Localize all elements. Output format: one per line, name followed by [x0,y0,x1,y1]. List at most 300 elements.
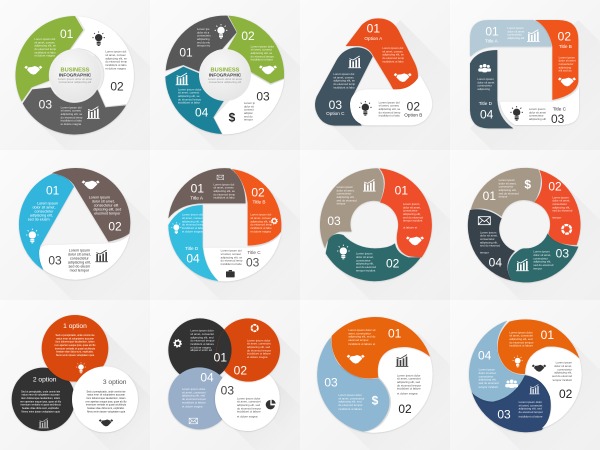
text 02: adipiscing elit, [554,371,572,375]
text 02: incididunt ut labo [250,226,272,230]
icon: bar chart [39,419,49,428]
text 03: do eiusmod tempor [237,406,261,410]
icon: ring [251,325,258,331]
text 02: incididunt ut labo [379,114,400,118]
panel: tile 12, four-part swirl [450,300,600,450]
icon: pie chart [266,400,276,409]
number 01: 01 [179,46,193,60]
hub circle [199,49,251,101]
text 03: consectetur [529,114,544,118]
panel: tile 5, circle with triangular hollow [0,150,150,300]
icon: handshake [82,180,100,189]
hub text: consectetur adipiscing elit [59,80,91,84]
text 03: sit amet, consec [221,252,242,256]
number 01: 01 [367,22,380,36]
text 02: do eiusmod temp [379,110,401,114]
panel: tile 4, rounded square [450,0,600,150]
text 04: consectetur [480,237,495,241]
number 04: 04 [480,107,494,121]
text 02: consectetur [557,367,572,371]
number 01: 01 [46,183,60,197]
icon: handshake [347,355,365,364]
text 04: dolor sit amet, [480,234,498,238]
text 02: consectetur [559,62,573,66]
icon: handshake [394,73,412,82]
text 02: consectetur [552,202,567,206]
text 01: et dolore magna [190,345,211,349]
number 03: 03 [556,247,569,261]
text 01: adipiscing elit, se [213,189,235,193]
text 04: sit amet, consectet [182,390,206,394]
hub text: consectetur adipiscing elit [209,80,241,84]
text 01: dolor sit amet, [33,206,55,210]
text option 2: beatae vitae dicta sunt, explicabo. [22,407,60,410]
number 01: 01 [485,24,499,38]
segment 03 gray [23,87,126,135]
text 02: Lorem ipsum dolor [247,338,270,342]
text 03: dolor sit amet, [337,188,355,192]
text 02: sit amet, consectet [247,342,271,346]
text 04: consectetur [477,84,492,88]
number 01: 01 [60,27,74,41]
text 02: Lorem ipsum [559,55,576,59]
hub circle [49,49,101,101]
number 03: 03 [256,90,270,104]
title C: Title C [553,107,567,112]
icon: mail [189,418,198,424]
text 03: adipiscing elit, sed [338,400,362,404]
text 01: tempor incidunt [403,219,423,223]
text 01: sed do eiusm [28,218,50,222]
number 04: 04 [200,370,214,384]
panel: tile 7, donut with three segments [300,150,450,300]
text 01: adipiscing elit, [403,212,421,216]
text 02: do eiusmod tempor [397,383,421,387]
segment 03 tan [320,168,384,248]
icon: bulb [337,245,350,259]
icon: bar chart [527,30,540,42]
segment 01 dark gray [166,16,237,72]
text 01: sit amet, consec [382,49,403,53]
icon: mail [217,175,224,180]
text 03: adipiscing elit, sed [237,403,261,407]
text 02: sit amet, consec [105,53,126,57]
number 04: 04 [195,106,209,120]
text option 1: rem aperiam eaque ipsa, quae ab illo [55,344,96,347]
text 03: incididunt ut labore [519,415,543,419]
text 02: sed do eiusmod [552,209,573,213]
icon: mail [478,217,490,225]
text 01: adipiscing elit, sed do [348,335,376,339]
title B: Title B [252,200,266,205]
text 02: adipiscing elit, sed [397,380,421,384]
icon: bulb [510,106,523,121]
text 01: adipiscing elit, se [34,44,56,48]
text 01: Lorem ips [197,27,210,31]
icon: bulb [513,356,523,367]
text 02: Lorem ipsum dolor [397,373,420,377]
text 01: sed do eiu [197,40,210,44]
text 02: Lorem ipsum dol [105,50,127,54]
text 02: do eiusmod tempo [251,54,274,58]
text 03: do eiusmod tempor [338,403,363,407]
text 01: sed do eiusmod [499,191,519,195]
text 01: consectetur [507,33,522,37]
circle 01 dark [168,318,232,382]
text 03: dolor sit amet [529,110,546,114]
number 01: 01 [541,328,554,342]
text 01: consectetur [499,185,513,189]
text 03: adipiscing elit, se [61,112,83,116]
text 01: sit amet, consec [213,186,234,190]
text 03: adipisc [244,111,253,115]
icon: gear [174,340,181,347]
text 02: sit amet, consect [251,48,272,52]
text 01: adipiscing elit, [30,214,53,218]
text 02: dolor sit amet [559,59,576,63]
text 03: adipiscing elit [529,117,546,121]
icon: bulb [92,31,105,46]
text 01: incididunt ut labore [509,344,534,348]
text 04: Lorem ipsum [479,368,496,372]
text 03: dolor sit amet, [533,253,551,257]
segment 01 green [16,16,83,102]
text 04: Lorem ipsum [477,77,494,81]
segment 01 brown [168,168,246,218]
text 03: incididunt ut labo [333,85,355,89]
number 03: 03 [327,214,341,228]
icon: handshake [24,66,42,75]
text 03: sed do [244,114,253,118]
circle 04 blue [168,367,230,429]
text 02: et dolore magna [105,66,126,70]
text 02: Lorem ipsum dolor [251,44,274,48]
number 04: 04 [478,349,492,363]
text 03: adipiscing elit, se [333,79,355,83]
segment 01 tan [471,168,541,217]
text 02: dolor sit amet, [92,200,115,204]
text 03: sit amet, consectet [237,400,261,404]
segment 04 light blue [469,321,525,402]
option 2 title: 2 option [33,376,57,383]
number 03: 03 [551,112,565,126]
text option 3: beatae vitae dicta sunt, explicabo. [87,407,125,410]
text 02: et dolore magna [397,391,418,395]
text 01: Lorem ipsum dol [213,182,235,186]
text 02: adipiscing elit, sed [247,345,271,349]
option A: Option A [364,36,383,41]
text 03: Lorem ipsum dol [61,105,82,109]
text 01: consectetu [197,34,211,38]
text 02: incididunt ut labo [105,63,127,67]
segment 02 white [363,346,433,433]
icon: bulb [26,229,39,243]
text 03: Lorem ipsum dol [221,249,242,253]
text 01: incididunt ut labo [382,59,404,63]
number 02: 02 [559,387,573,401]
text 02: consectetur [356,258,371,262]
text 03: tempor [533,266,542,270]
text option 3: Nemo enim ipsam voluptatem quia [87,410,126,413]
text 04: sed do eiusmod [479,381,499,385]
text 02: dolor sit amet, [356,255,374,259]
text 02: Lorem ipsum [556,361,573,365]
text 01: amet, consectetur [348,331,371,335]
text 03: Lorem ip [244,101,255,105]
text option 3: Sed ut perspiciatis, unde omnis iste [86,390,126,393]
text option 1: natus error sit voluptatem accusan [56,337,95,340]
number 02: 02 [108,220,122,234]
text 03: Lorem ipsum dol [333,72,355,76]
text 02: Lorem ipsum [89,196,110,200]
text 04: tempor incidunt [479,385,498,389]
icon: briefcase [226,270,235,277]
text 04: do eiusmod tempor [182,397,206,401]
text 03: sed do eiusmod [337,198,357,202]
text 01: incididunt ut labore [190,342,215,346]
text 02: dipiscing elit, sed [93,208,121,212]
text 03: incididunt ut labo [61,119,82,123]
text 02: tempor incidunt [356,268,376,272]
segment 03 white [39,235,129,280]
text 03: et dolore magna [237,414,258,418]
text 03: incididunt ut labore [338,407,363,411]
number 02: 02 [234,363,247,377]
segment 02 orange [534,170,581,245]
text 01: Lorem ipsum [403,202,420,206]
text 01: Lorem ipsum dolor [509,330,533,334]
text 02: dolor sit amet, [552,199,570,203]
segment 02 white [71,16,134,107]
text 03: Lorem ipsum [533,250,550,254]
text 01: Lorem ipsum [37,202,58,206]
text 02: sed do eiusmod [356,265,376,269]
text 02: do eiusmod temp [105,60,127,64]
number 02: 02 [251,186,265,200]
icon: bar chart [529,385,539,394]
text 03: tempor [337,202,346,206]
text 04: et dolore magna [182,229,203,233]
icon: bulb [215,24,227,39]
number 04: 04 [186,251,200,265]
text 01: tempor [499,195,508,199]
text 02: Lorem ipsum [356,252,373,256]
segment 04 dark [468,209,515,281]
text 03: do eiusmod temp [221,259,243,263]
icon: bar chart [95,250,108,262]
text 03: Lorem ipsum dolor [338,393,362,397]
icon: handshake [406,236,424,245]
option 3 title: 3 option [103,379,127,386]
text option 2: inventore veritatis et quasi architecto [21,404,61,407]
text 03: consectetur [533,256,548,260]
text 04: Lorem ipsum dolor [182,387,205,391]
text 01: aliqua ut enim ad [190,348,212,352]
hub text: Lorem ipsum dolor sit amet [208,77,242,81]
text 03: adipiscing elit, [68,261,91,265]
text option 2: natus error sit voluptatem accusan [22,394,60,397]
text option 3: tium doloremque laudantium, totam [87,397,125,400]
number 02: 02 [407,99,420,113]
text 04: sed do eiusmod [480,244,500,248]
segment 03 navy [472,375,551,432]
text 01: do eiusmod tempor [190,339,215,343]
text 02: sit amet, consec [379,104,400,108]
text 04: incididunt ut labore [182,400,206,404]
text 03: Lorem ipsum dolor [237,396,260,400]
text 02: adipiscing elit, se [250,219,272,223]
text 04: adipiscing elit, se [178,94,200,98]
text 01: Lorem ipsum dol [34,37,56,41]
text 02: tempor incidunt [553,378,572,382]
number 03: 03 [221,384,234,398]
text 02: incididunt ut labor [251,58,273,62]
text 01: dolor sit amet, [499,181,517,185]
icon: bulb [76,362,86,373]
option 1 title: 1 option [63,323,87,330]
number 03: 03 [329,98,342,112]
icon: bar chart [176,73,188,85]
text 01: et dolore magna [34,54,55,58]
segment 04 navy [470,50,513,128]
number 01: 01 [214,350,227,364]
segment 01 orange [346,18,418,95]
text 04: adipiscing elit, [479,378,497,382]
icon: bar chart [87,107,100,119]
icon: handshake [259,65,277,74]
icon: people [505,379,518,388]
number 03: 03 [324,376,338,390]
text 04: dolor sit amet [477,80,495,84]
option C: Option C [326,111,345,116]
text 02: sed do eiusmod [552,374,572,378]
text option 1: tium doloremque laudantium, totam [56,341,94,344]
segment 02 white [350,75,432,125]
number 01: 01 [483,189,496,203]
text 01: Lorem ipsum dolor sit [348,328,376,332]
text 01: sit amet, consectet [190,332,214,336]
number 03: 03 [497,408,511,422]
text 03: adipiscing elit, se [221,255,243,259]
text 04: Lorem ipsum dolor [178,87,201,91]
icon: bar chart [363,179,376,191]
text 02: adipiscing elit, [552,205,570,209]
text 04: et dolore magna [182,404,203,408]
text 04: incididunt ut labo [182,226,204,230]
text 01: do eiusmod tempor [509,340,534,344]
text 01: consectetur [35,210,54,214]
circle 2 dark [12,368,75,431]
text 03: consectetur [337,192,351,196]
option B: Option B [404,113,422,118]
circle 02 orange [217,318,280,382]
segment 02 orange [535,20,578,100]
text 02: sit amet, consectet [397,377,421,381]
icon: bar chart [396,355,408,367]
icon: handshake [558,77,576,86]
segment 03 white [500,87,579,125]
text 01: incididunt ut labo [213,196,235,200]
panel: tile 2, arrow ring with four segments [150,0,300,150]
text 03: consect [244,108,254,112]
text 01: do eiusmod temp [213,192,235,196]
text 01: adipiscing elit, [499,188,517,192]
segment 01 orange [331,317,430,379]
segment 02 brown [52,168,130,242]
text 04: do eiusmod temp [182,223,204,227]
text 01: consectetur [403,209,418,213]
text 04: adipiscing elit, [480,240,498,244]
text 03: adipiscing elit, [337,195,355,199]
title B: Title B [559,44,572,49]
text 03: dolor sit [244,104,254,108]
segment 03 navy [315,47,373,126]
icon: dollar: $ [229,111,236,125]
hub title: BUSINESS [211,68,240,74]
text 02: Lorem ipsum dol [250,213,272,217]
icon: people [478,64,491,72]
text option 1: Nemo enim ipsam voluptatem quia [56,354,95,357]
text 03: Lorem ipsum [529,107,546,111]
segment 04 blue [165,67,224,134]
text 02: consectetur elit [94,204,118,208]
text 01: sit amet, consec [34,40,55,44]
text 04: incididunt ut labor [178,101,200,105]
number 01: 01 [191,182,204,196]
panel: tile 9, three overlapping circles [0,300,150,450]
text 03: sed do eiusm [68,265,90,269]
title A: Title A [190,196,204,201]
text option 2: Nemo enim ipsam voluptatem quia [22,410,60,413]
number 03: 03 [48,253,62,267]
segment 03 blue [317,337,390,432]
text 01: adipiscing elit [507,36,525,40]
text option 1: beatae vitae dicta sunt, explicabo. [56,351,94,354]
text 03: Lorem ipsum [337,185,354,189]
number 04: 04 [489,255,502,269]
text 04: Lorem ipsum [480,230,497,234]
icon: bar chart [348,56,361,68]
segment 03 white [214,73,284,134]
text 02: sit amet, consec [250,216,271,220]
text 03: sed do eiusmod [533,263,554,267]
text 03: do eiusmod tempor [519,410,543,414]
segment 01 light blue [470,20,552,57]
segment 02 green [227,16,284,83]
icon: bulb [359,101,372,116]
text 04: adipiscing elit, sed [182,394,206,398]
text 04: adipiscing elit, se [182,219,204,223]
text 01: Lorem ipsum dol [382,46,404,50]
text 02: adipiscing elit, se [379,107,401,111]
text 01: dolor sit amet [507,29,525,33]
text 03: sit amet, consec [333,75,354,79]
text 03: mod tempor [70,269,90,273]
hub subtitle: INFOGRAPHIC [59,73,92,78]
text 01: dolor sit a [197,30,210,34]
text 03: Lorem ipsum dolor [519,400,542,404]
number 01: 01 [388,326,402,340]
text 03: Lorem ipsum [69,249,90,253]
title C: Title C [247,250,261,255]
text 03: do eiusmod temp [333,82,355,86]
icon: bar chart [516,259,529,271]
text 01: do eiusmod temp [382,56,404,60]
text 01: incididunt ut labore et [348,342,375,346]
text 02: incididunt ut labore [247,352,271,356]
text 03: do eiusmod temp [61,115,83,119]
number 02: 02 [398,402,412,416]
